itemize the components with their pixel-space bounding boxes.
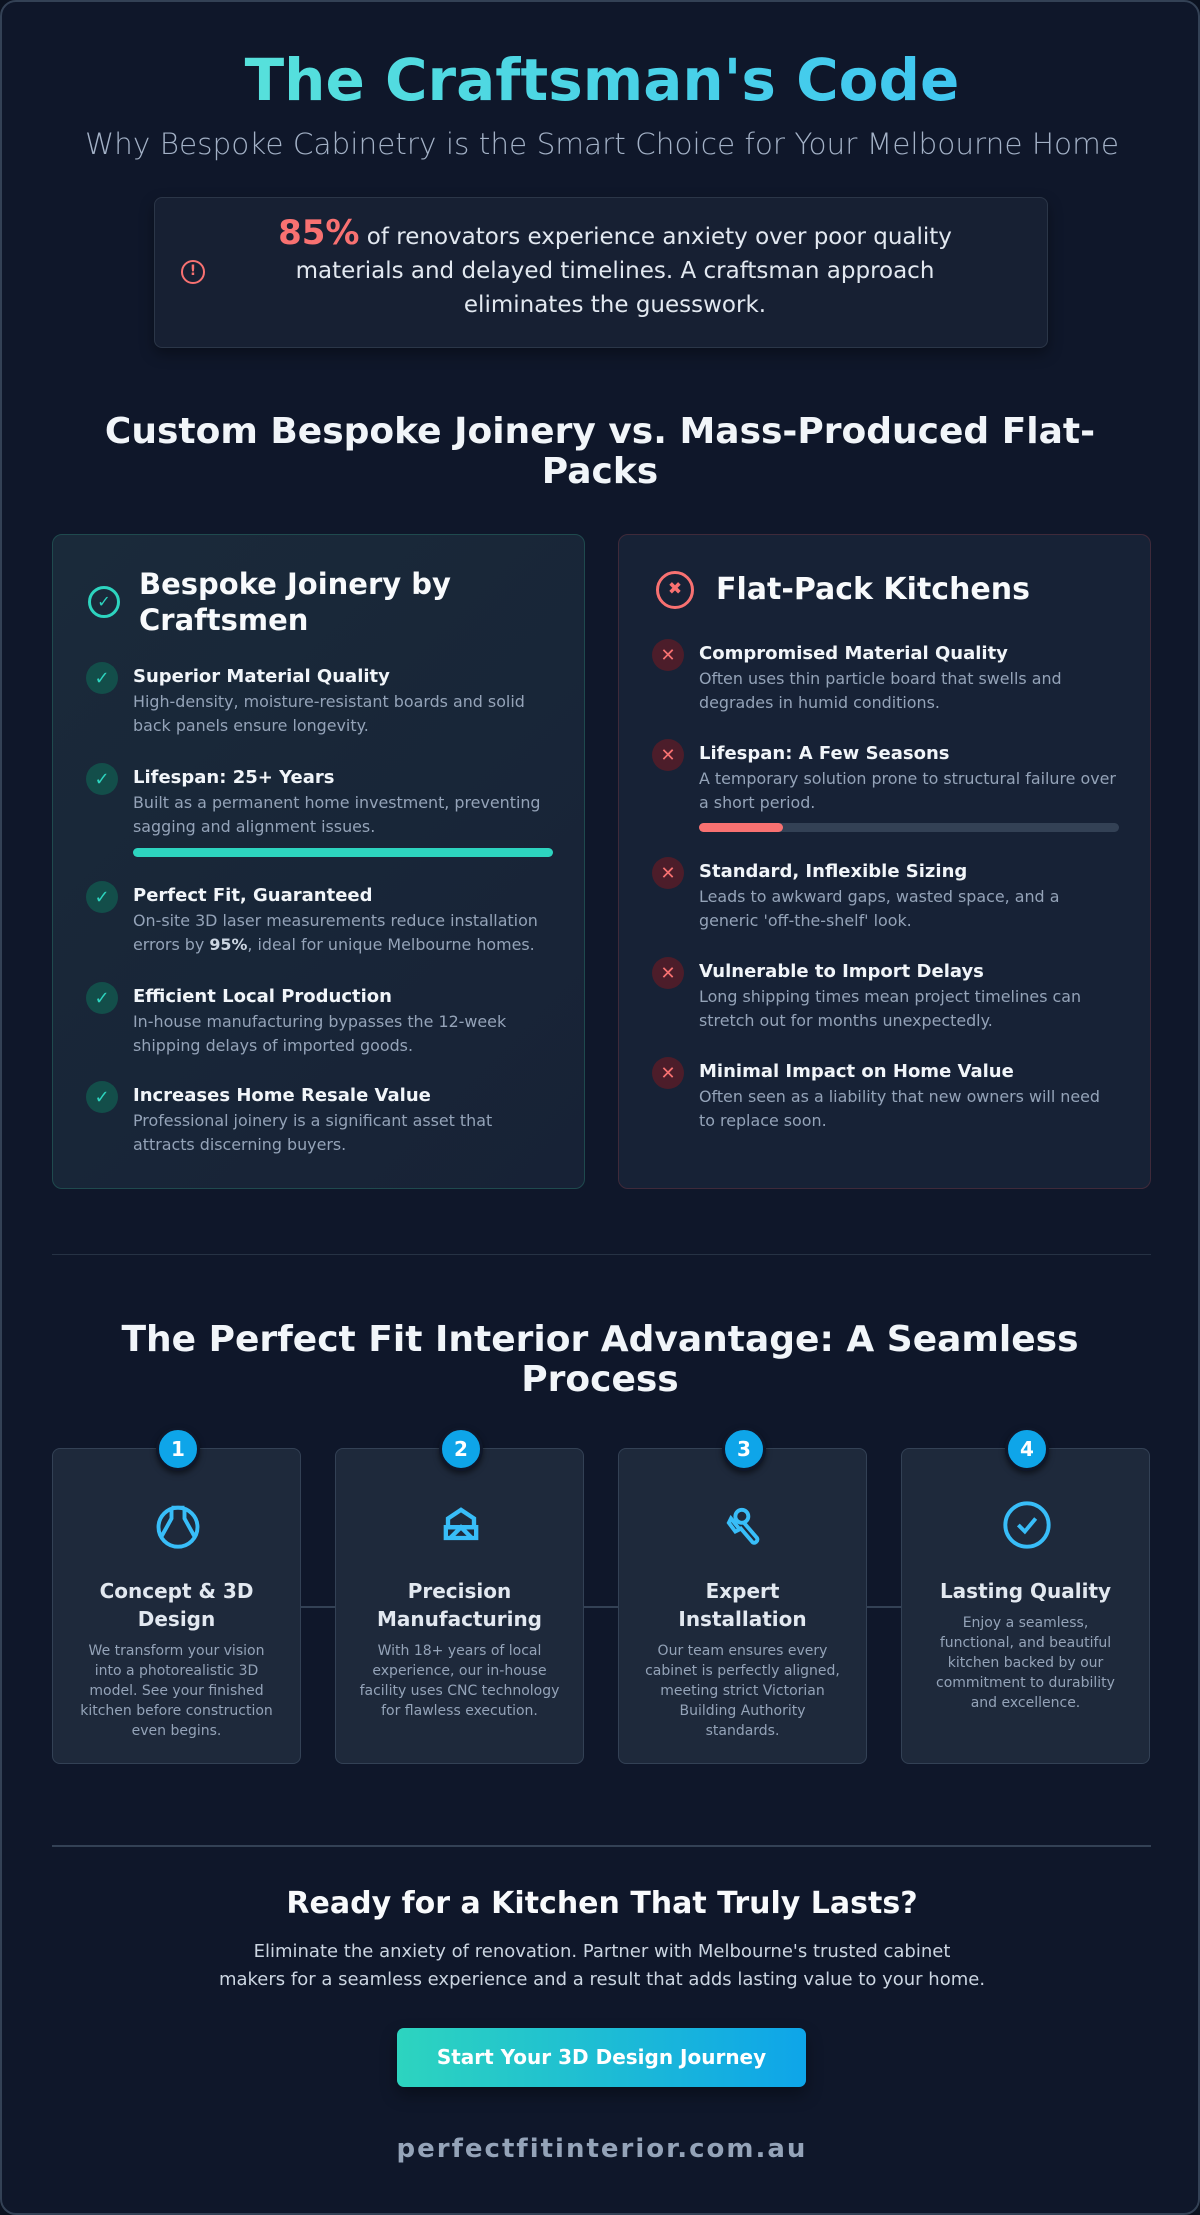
- item: material: [86, 662, 525, 735]
- icon: x circle: [656, 571, 694, 609]
- icon: check: [1003, 1501, 1051, 1549]
- panel: bespoke joinery: ✓: [94, 768, 110, 790]
- item: lifespan: [652, 739, 1116, 812]
- icon: check circle: [88, 586, 120, 618]
- icon: flask: [156, 1506, 200, 1549]
- panel: flat-pack: Lifespan: A Few Seasons: [699, 743, 950, 764]
- heading: process: The Perfect Fit Interior Advantage: A Seamless Process: [121, 1319, 1079, 1400]
- panel: bespoke joinery: High-density, moisture-resistant boards and solid back panels ensure longevity.: [133, 692, 525, 735]
- panel: flat-pack: ✕: [660, 862, 676, 884]
- badge 3: 3: [737, 1437, 751, 1461]
- panel: bespoke joinery: Increases Home Resale Value: [133, 1085, 431, 1106]
- panel: flat-pack: Often uses thin particle board that swells and degrades in humid conditions.: [699, 669, 1062, 712]
- panel: bespoke joinery: [52, 534, 585, 1189]
- panel: bespoke joinery: ✓: [94, 988, 110, 1008]
- panel: bespoke joinery: On-site 3D laser measurements reduce installation errors by 95%, ideal for unique Melbourne homes.: [133, 911, 538, 954]
- CTA button: Start Your 3D Design Journey: [437, 2045, 766, 2069]
- callout: 85% stat: [154, 197, 1048, 348]
- panel: flat-pack: [618, 534, 1151, 1189]
- panel: bespoke joinery: In-house manufacturing bypasses the 12-week shipping delays of imported goods.: [133, 1012, 506, 1055]
- panel: bespoke joinery: Superior Material Quality: [133, 666, 390, 687]
- badge 2: 2: [454, 1437, 468, 1461]
- item: sizing: [652, 857, 1059, 930]
- card: step 4: Enjoy a seamless, functional, and beautiful kitchen backed by our commitment to durability and excellence.: [936, 1615, 1115, 1711]
- panel: bespoke joinery: Efficient Local Production: [133, 986, 392, 1007]
- panel: bespoke joinery: ✓: [94, 1086, 110, 1108]
- panel: flat-pack: A temporary solution prone to structural failure over a short period.: [699, 769, 1116, 812]
- CTA heading: Ready for a Kitchen That Truly Lasts?: [286, 1886, 918, 1921]
- card: step 3: Our team ensures every cabinet is perfectly aligned, meeting strict Victorian Building Authority standards.: [645, 1643, 840, 1739]
- card: step 1: Design: [138, 1607, 215, 1631]
- title: The Craftsman's Code: [245, 46, 959, 114]
- card: step 1: [52, 1448, 301, 1764]
- badge 2: [439, 1427, 483, 1471]
- item: resale value: [86, 1081, 492, 1154]
- panel: flat-pack: Minimal Impact on Home Value: [699, 1061, 1014, 1082]
- heading: comparison: Custom Bespoke Joinery vs. Mass-Produced Flat-Packs: [105, 411, 1095, 492]
- panel heading: Flat-Pack Kitchens: [716, 572, 1030, 607]
- panel heading: [139, 567, 451, 637]
- card: step 4: [901, 1448, 1150, 1764]
- panel: bespoke joinery: ✓: [94, 668, 110, 688]
- panel: flat-pack: Standard, Inflexible Sizing: [699, 861, 967, 882]
- footer url: perfectfitinterior.com.au: [397, 2134, 807, 2164]
- item: perfect fit: [86, 881, 538, 954]
- icon: alert: [181, 260, 205, 284]
- bar: lifespan short: [699, 823, 1119, 832]
- badge 1: [156, 1427, 200, 1471]
- card: step 2: [335, 1448, 584, 1764]
- badge 1: 1: [171, 1437, 185, 1461]
- icon: manufacturing: [444, 1507, 478, 1540]
- panel heading: Craftsmen: [139, 603, 308, 637]
- panel: flat-pack: Compromised Material Quality: [699, 643, 1008, 664]
- card: step 2: With 18+ years of local experience, our in-house facility uses CNC technology for flawless execution.: [360, 1643, 559, 1719]
- card: step 3: [618, 1448, 867, 1764]
- card: step 3: Expert: [706, 1579, 779, 1603]
- CTA button: [397, 2028, 806, 2087]
- item: material: [652, 639, 1062, 712]
- item: lifespan: [86, 763, 541, 836]
- panel: bespoke joinery: Lifespan: 25+ Years: [133, 767, 334, 788]
- item: local production: [86, 982, 506, 1055]
- card: step 1: We transform your vision into a photorealistic 3D model. See your finished kitchen before construction even begins.: [80, 1643, 273, 1739]
- subtitle: Why Bespoke Cabinetry is the Smart Choice for Your Melbourne Home: [85, 127, 1119, 161]
- panel: flat-pack: ✕: [660, 644, 676, 666]
- CTA text: makers for a seamless experience and a result that adds lasting value to your home.: [219, 1969, 985, 1990]
- panel: bespoke joinery: Built as a permanent home investment, preventing sagging and alignment issues.: [133, 793, 541, 836]
- icon: x circle: ✖: [668, 579, 682, 599]
- panel: bespoke joinery: Perfect Fit, Guaranteed: [133, 885, 373, 906]
- badge 3: [722, 1427, 766, 1471]
- panel: flat-pack: Vulnerable to Import Delays: [699, 961, 984, 982]
- icon: check circle: ✓: [97, 592, 111, 611]
- panel: bespoke joinery: Professional joinery is a significant asset that attracts discerning buyers.: [133, 1111, 492, 1154]
- card: step 2: Manufacturing: [377, 1607, 542, 1631]
- icon: tool: [726, 1508, 760, 1545]
- card: step 4: Lasting Quality: [940, 1579, 1111, 1603]
- panel: flat-pack: Leads to awkward gaps, wasted space, and a generic 'off-the-shelf' look.: [699, 887, 1059, 930]
- panel heading: Bespoke Joinery by: [139, 567, 451, 601]
- badge 4: 4: [1020, 1437, 1034, 1461]
- panel: flat-pack: Often seen as a liability that new owners will need to replace soon.: [699, 1087, 1100, 1130]
- card: step 3: Installation: [678, 1607, 807, 1631]
- item: import delays: [652, 957, 1081, 1030]
- callout text: 85% of renovators experience anxiety over poor quality materials and delayed timelines. A craftsman approach eliminates the guesswork.: [278, 213, 952, 318]
- badge 4: [1005, 1427, 1049, 1471]
- card: step 2: Precision: [408, 1579, 511, 1603]
- card: step 1: Concept & 3D: [100, 1579, 253, 1603]
- icon: alert: !: [190, 263, 196, 279]
- panel: bespoke joinery: ✓: [94, 886, 110, 908]
- CTA text: [219, 1941, 985, 1990]
- panel: flat-pack: Long shipping times mean project timelines can stretch out for months unexpectedly.: [699, 987, 1081, 1030]
- panel: flat-pack: ✕: [660, 744, 676, 766]
- panel: flat-pack: ✕: [660, 1062, 676, 1084]
- panel: flat-pack: ✕: [660, 962, 676, 984]
- item: home value: [652, 1057, 1100, 1130]
- bar: lifespan full: [133, 848, 553, 857]
- CTA text: Eliminate the anxiety of renovation. Partner with Melbourne's trusted cabinet: [254, 1941, 950, 1962]
